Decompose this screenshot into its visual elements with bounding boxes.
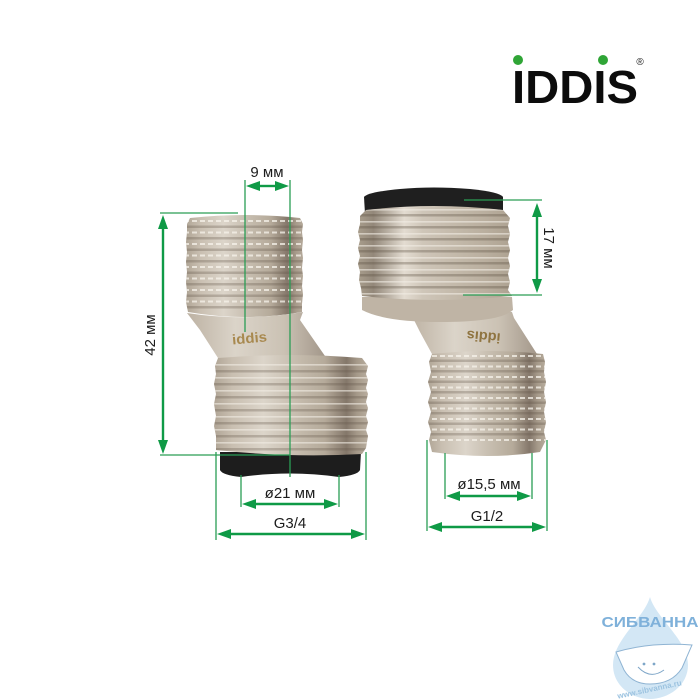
- black gasket, left fitting: [220, 452, 361, 477]
- left fitting: [186, 212, 368, 477]
- dimension: 9 mm: 9 мм: [250, 164, 284, 181]
- neck, right fitting: [410, 312, 537, 354]
- iddis mark on neck, mirrored: iddis: [466, 328, 501, 346]
- dimension: 17 mm: 17 мм: [540, 227, 557, 269]
- watermark name: СИБВАННА: [602, 614, 699, 631]
- dimension: G1/2: G1/2: [471, 508, 503, 525]
- watermark: Sibvanna water drop with bath: [602, 597, 699, 700]
- dimension: 17 mm: [463, 200, 557, 295]
- dimension: G1/2: [427, 440, 547, 532]
- lower thread, right fitting: [428, 348, 546, 458]
- lower thread, left fitting: [214, 352, 368, 458]
- bath tub: [616, 644, 692, 684]
- infographic canvas: [145, 55, 698, 699]
- dimension: 42 mm: 42 мм: [142, 314, 159, 356]
- dimension: 15,5 mm inner diameter: ø15,5 мм: [457, 476, 521, 493]
- flange, right fitting: [362, 297, 513, 322]
- brand logo: IDDIS: IDDIS: [512, 61, 638, 113]
- upper thread, right fitting: [358, 206, 512, 300]
- neck, left fitting: [187, 312, 325, 361]
- dimension: G3/4: [216, 452, 366, 540]
- dimension: 9 mm: [245, 164, 290, 477]
- dimension: 15,5 mm inner diameter: [445, 453, 532, 501]
- dimension: 42 mm: [142, 213, 290, 455]
- brand logo: IDDIS: ®: [636, 57, 644, 68]
- upper thread, left fitting: [186, 212, 304, 322]
- black gasket, right fitting: [364, 188, 503, 214]
- dimension: 21 mm inner diameter: [241, 475, 339, 509]
- dimension: 21 mm inner diameter: ø21 мм: [265, 485, 315, 502]
- right fitting: [358, 188, 546, 458]
- dimension: G3/4: G3/4: [274, 515, 306, 532]
- iddis mark on neck: iddis: [231, 328, 268, 347]
